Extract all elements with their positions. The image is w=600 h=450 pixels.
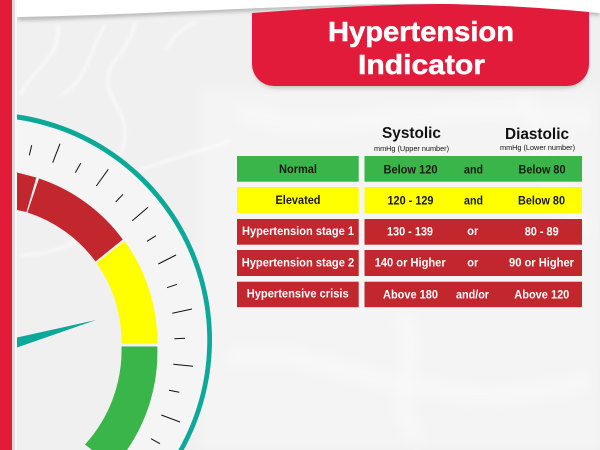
row: normal: Below 120 (384, 164, 438, 176)
title banner (252, 4, 589, 88)
column heading: diastolic (500, 126, 575, 152)
row: normal: Below 80 (518, 164, 566, 176)
band: green segment (85, 346, 157, 450)
title text: Indicator (358, 49, 485, 80)
column heading: systolic (374, 125, 449, 153)
top white curved strip (12, 0, 600, 18)
title text (328, 16, 514, 80)
row: normal: and (464, 164, 483, 176)
row: hypertensive crisis: Above 180 (383, 290, 438, 302)
row: normal (237, 156, 582, 182)
row: elevated: and (464, 196, 483, 208)
column heading: systolic: Systolic (382, 125, 441, 142)
row: hypertension stage 1: or (467, 226, 479, 238)
column heading: diastolic: mmHg (Lower number) (500, 145, 575, 152)
row: hypertension stage 1: 130 - 139 (387, 226, 433, 238)
column heading: systolic: mmHg (Upper number) (374, 146, 449, 153)
gauge light ring (17, 118, 208, 450)
row: elevated: 120 - 129 (388, 196, 434, 208)
row: hypertension stage 2 (237, 250, 582, 276)
row: hypertensive crisis: Above 120 (514, 290, 569, 302)
row: hypertension stage 2: 90 or Higher (509, 258, 575, 270)
row: hypertensive crisis: Hypertensive crisis (247, 288, 349, 300)
column heading: diastolic: Diastolic (505, 126, 569, 143)
left red edge bar (0, 0, 17, 450)
band: yellow segment (96, 241, 157, 344)
gauge needle (17, 320, 96, 348)
row: hypertension stage 2: 140 or Higher (375, 258, 446, 270)
gauge dial (17, 114, 212, 450)
band: red left segment (17, 172, 36, 212)
row: hypertension stage 1: Hypertension stage 1 (242, 226, 355, 238)
title text: Hypertension (328, 16, 514, 47)
row: elevated: Elevated (276, 195, 320, 207)
gauge teal rim (17, 114, 212, 450)
row: elevated (237, 187, 582, 213)
gauge tick marks (29, 144, 193, 444)
row: hypertension stage 2: or (467, 258, 479, 270)
row: hypertension stage 1 (237, 219, 582, 245)
band: red segment (28, 178, 123, 262)
row: hypertensive crisis: and/or (456, 290, 489, 302)
row: hypertension stage 1: 80 - 89 (525, 226, 559, 238)
row: hypertension stage 2: Hypertension stage 2 (242, 258, 354, 270)
row: elevated: Below 80 (518, 196, 565, 208)
row: hypertensive crisis (237, 282, 582, 307)
row: normal: Normal (279, 164, 317, 176)
